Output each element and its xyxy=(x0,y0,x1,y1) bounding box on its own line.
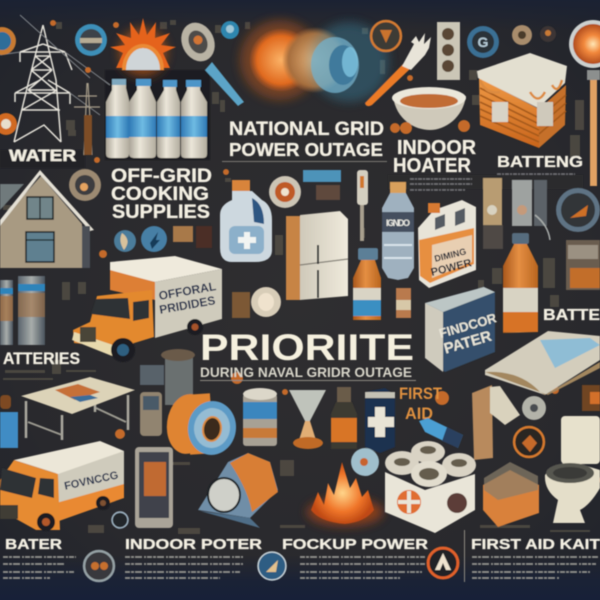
label: batte: BATTE xyxy=(543,307,600,324)
icon: bowl xyxy=(392,87,466,130)
icon: round plate xyxy=(232,287,281,318)
label: off-grid cooking supplies: SUPPLIES xyxy=(112,202,210,223)
icon: dim round badge xyxy=(351,448,379,476)
icon: bottom badge right xyxy=(428,548,458,578)
icon: ribbon panel xyxy=(582,385,600,411)
icon: paper towel roll xyxy=(472,385,520,460)
label: indoor hoater: INDOOR xyxy=(397,137,477,159)
bottom labels: FOCKUP POWER xyxy=(282,536,428,553)
box: findoor pater: FINDCOR xyxy=(437,310,499,341)
title block: national grid power outage: NATIONAL GRID xyxy=(229,119,384,140)
main title: DURING NAVAL GRIDR OUTAGE xyxy=(200,364,412,380)
icon: orange tape roll xyxy=(163,391,240,458)
box: findoor pater: PATER xyxy=(442,328,494,358)
label: indoor hoater: HOATER xyxy=(393,155,472,177)
icon: lamp xyxy=(569,20,600,186)
main title xyxy=(200,327,416,381)
icon: folding table xyxy=(21,377,135,440)
bottom labels xyxy=(5,536,600,553)
label: off-grid cooking supplies xyxy=(111,166,212,223)
icon: small blue badge xyxy=(221,21,239,39)
icon: blue ring badge xyxy=(75,24,107,56)
bottom text blocks xyxy=(3,557,598,578)
bottom labels: INDOOR POTER xyxy=(125,536,262,553)
icon: orange photo panel xyxy=(566,240,600,290)
icon: fridge xyxy=(286,211,348,300)
label: first aid orange xyxy=(399,384,443,423)
label: first aid orange: FIRST xyxy=(399,384,443,403)
icon: campfire xyxy=(307,462,383,526)
icon: plastic water bottle: IGNDO xyxy=(386,218,410,228)
icon: top-left orange badge xyxy=(0,27,16,55)
icon: fork xyxy=(365,33,431,106)
icon: small disc xyxy=(522,396,546,420)
icon: delivery van xyxy=(0,441,124,531)
icon: delivery truck: PRIDIDES xyxy=(158,293,216,317)
icon: jerry can: POWER xyxy=(430,257,473,279)
icon: medicine bottle xyxy=(331,387,357,449)
icon: first aid box with rolls xyxy=(385,441,476,533)
icon: large amber bottle xyxy=(503,233,538,333)
icon: small bottle near pedestal xyxy=(396,288,411,318)
icon: plastic water bottle xyxy=(382,182,414,280)
label: water: WATER xyxy=(9,146,76,165)
icon: tent-shaped roll xyxy=(198,453,278,528)
label: batteng: BATTENG xyxy=(497,154,583,171)
title block: national grid power outage: POWER OUTAGE xyxy=(229,140,383,160)
milk bottles xyxy=(106,79,207,158)
icon: G badge: G xyxy=(478,34,489,50)
icon: small distant tower xyxy=(74,83,100,155)
bottom divider xyxy=(464,530,465,582)
icon: round target xyxy=(269,176,301,208)
icon: left orange gauge xyxy=(0,113,17,135)
icon: amber bottle xyxy=(353,248,381,320)
text lines under heading xyxy=(410,174,575,190)
icon: small circle badge by phone xyxy=(112,512,128,528)
icon: left cylinders xyxy=(0,276,45,345)
label: off-grid cooking supplies: OFF-GRID xyxy=(111,166,212,187)
icons: small blue badges xyxy=(114,226,212,252)
label: indoor hoater xyxy=(393,137,477,177)
label: batteries: ATTERIES xyxy=(3,349,80,368)
icon: house xyxy=(0,170,94,268)
label: off-grid cooking supplies: COOKING xyxy=(111,184,209,205)
icon: jerry can xyxy=(418,200,476,288)
icon: jerry can: DIMING xyxy=(433,246,467,264)
icon: bottom badge middle xyxy=(258,552,286,580)
icon: small gauge by house xyxy=(69,169,101,201)
icons: switches and devices xyxy=(483,178,550,249)
icon: G badge xyxy=(467,26,499,58)
icon: hourglass funnel xyxy=(289,390,326,449)
icon: switch panel xyxy=(437,22,460,80)
icon: glowing power orbs xyxy=(240,20,389,102)
icon: pillow xyxy=(485,331,600,395)
box: findoor pater xyxy=(425,287,499,372)
icon: sun burst xyxy=(110,18,176,76)
icon: delivery van: FOVNCCG xyxy=(63,469,120,493)
icon: first aid battery xyxy=(365,388,395,453)
small accents xyxy=(50,20,600,485)
icon: dim appliances cluster xyxy=(140,349,195,405)
icon: paint can xyxy=(243,388,277,446)
icon: phone xyxy=(135,447,173,528)
title block: national grid power outage xyxy=(222,119,387,162)
icon: thermometer tool xyxy=(357,170,368,241)
bottom labels: FIRST AID KAIT xyxy=(471,536,600,553)
bottom labels: BATER xyxy=(5,536,62,553)
icon: circular orange emblem xyxy=(371,21,401,51)
icon: round porthole xyxy=(556,188,600,232)
icon: delivery truck xyxy=(72,256,222,362)
icon: blue spray bottle xyxy=(419,418,463,448)
icon: delivery truck: OFFORAL xyxy=(158,279,217,303)
main title: PRIORIITE xyxy=(200,327,414,368)
icon: toilet xyxy=(545,416,600,523)
icons: small round badges top right xyxy=(512,25,556,45)
icon: orange emblem xyxy=(514,427,544,457)
icon: bottom badge left xyxy=(84,551,114,581)
icon: blue jar xyxy=(0,395,18,448)
icon: bleach jug xyxy=(220,180,272,262)
icon: spoon tool xyxy=(175,17,244,106)
icon: orange bag xyxy=(483,462,539,527)
label: first aid orange: AID xyxy=(405,404,433,423)
icon: blue gadget xyxy=(303,170,341,200)
icon: lantern cylinder xyxy=(140,392,162,436)
icon: orange cooler xyxy=(477,53,567,148)
icon: large transmission tower xyxy=(0,15,110,142)
